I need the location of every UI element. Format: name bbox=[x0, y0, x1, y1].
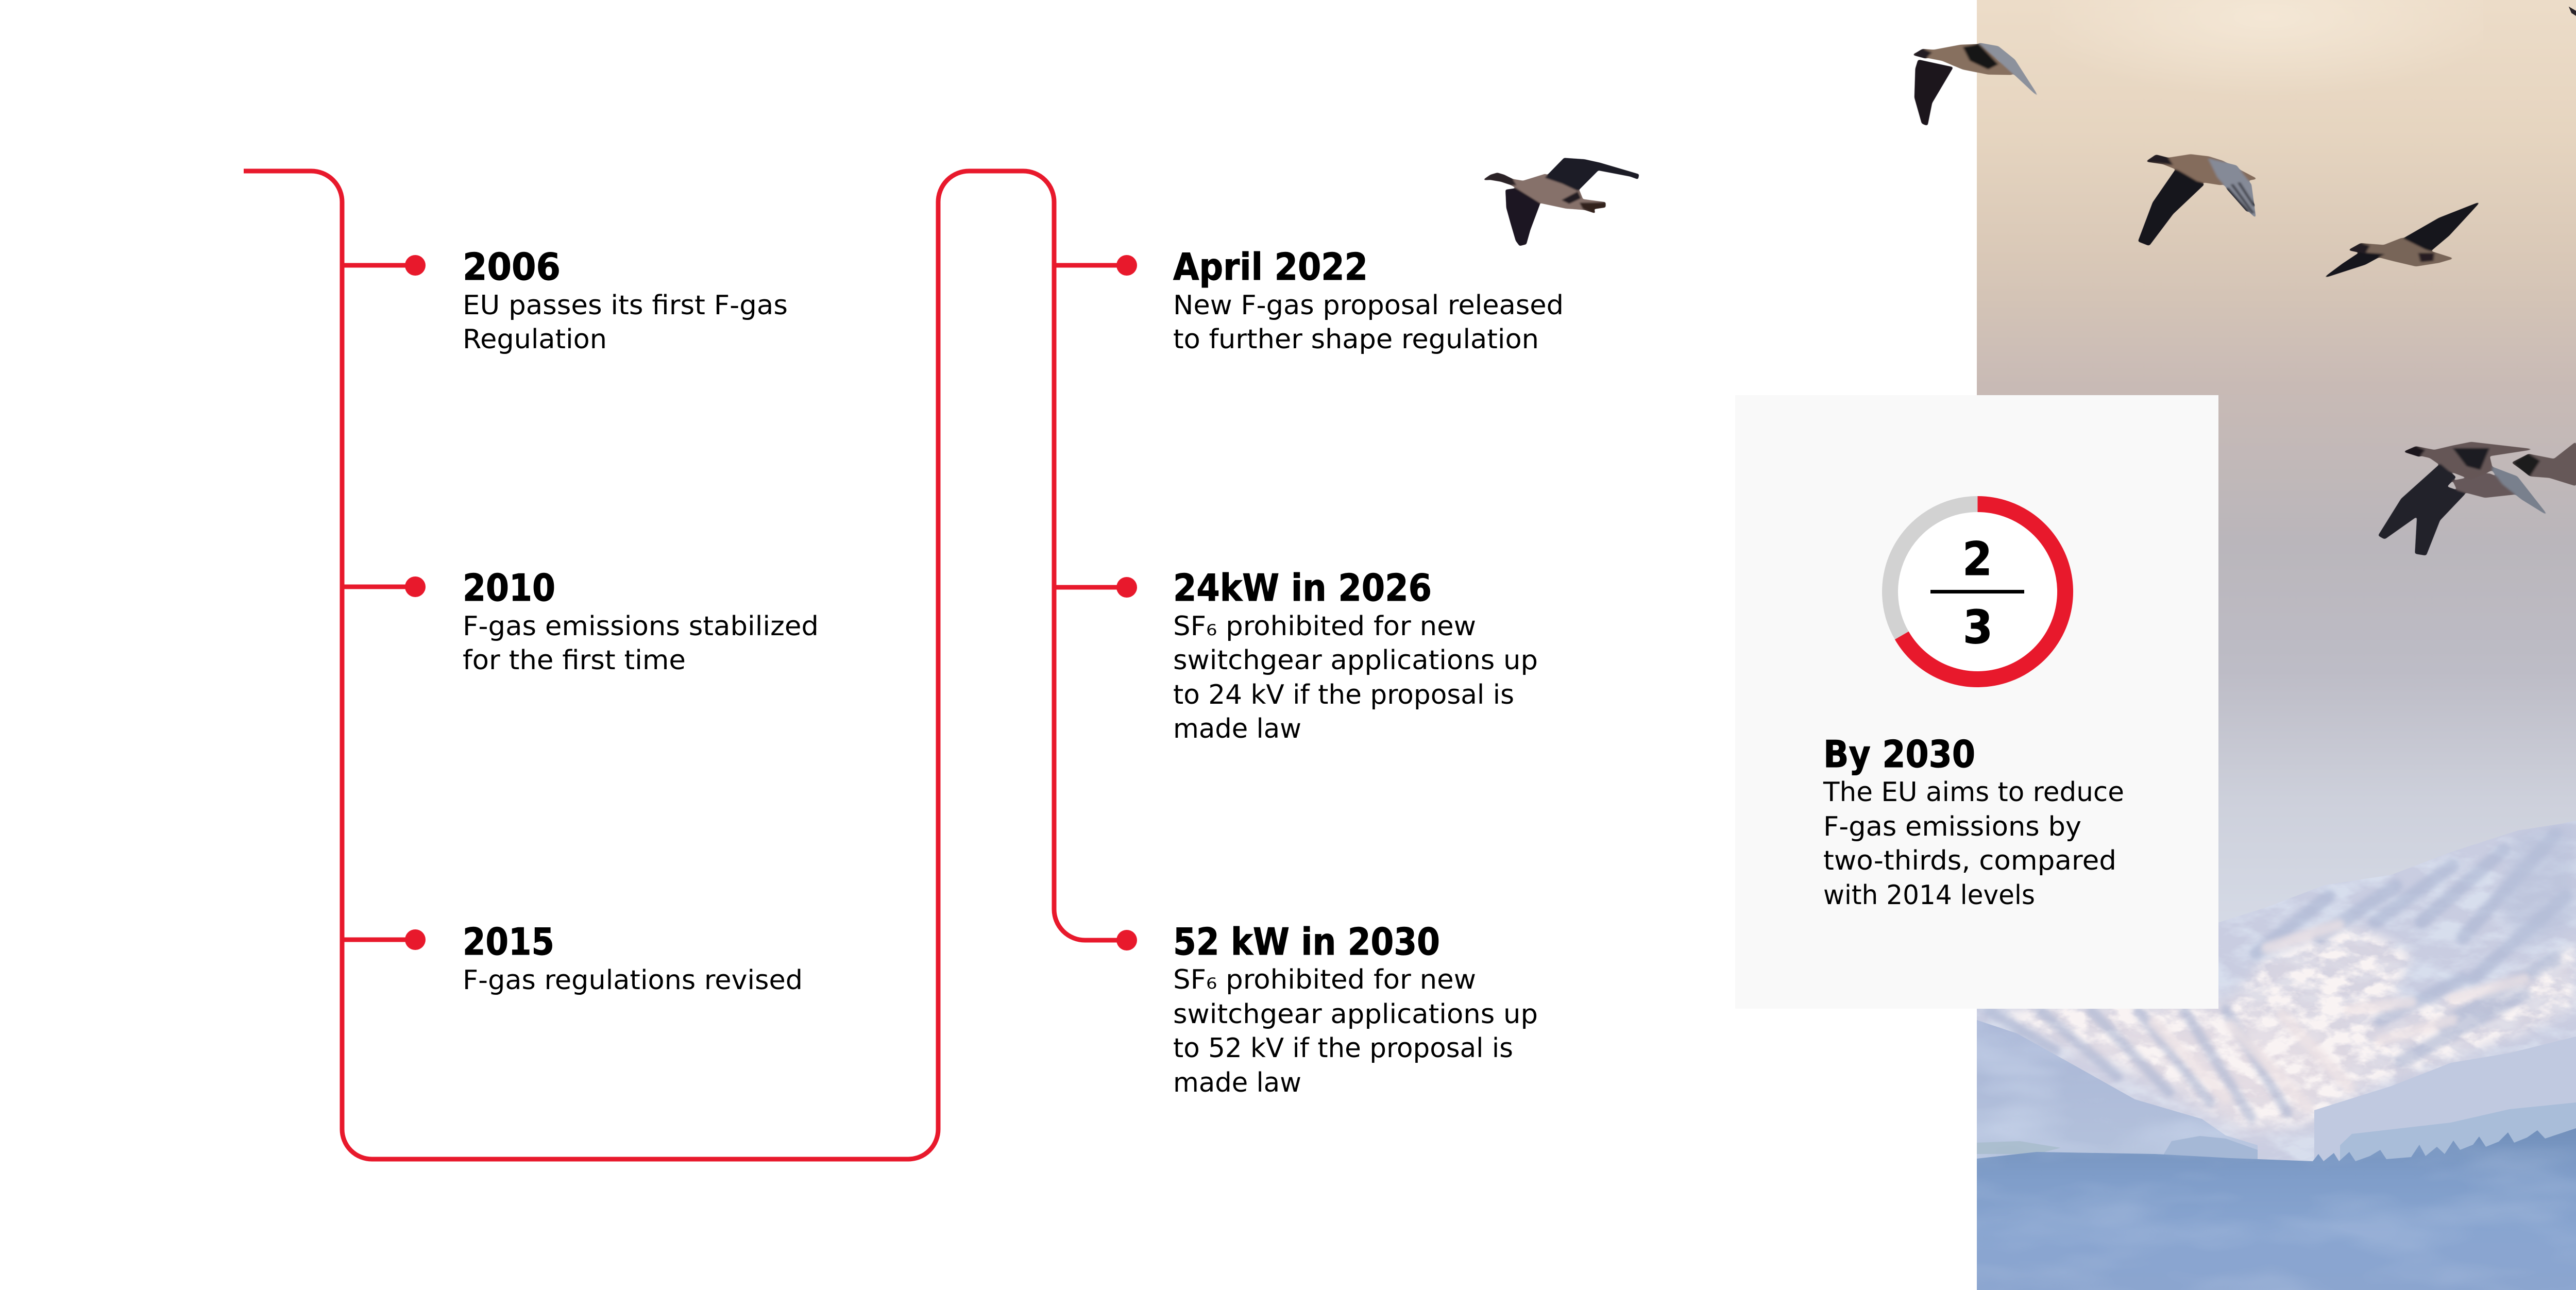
milestone: April 2022 bbox=[1054, 245, 1564, 355]
chart: two-thirds donut: 2 bbox=[1962, 532, 1992, 586]
milestone: 2010: for the first time bbox=[463, 645, 686, 676]
milestone: 52 kW in 2030: SF₆ prohibited for new bbox=[1173, 964, 1476, 995]
bird: goose on white area bbox=[1483, 158, 1639, 246]
milestone: 2006 bbox=[342, 245, 788, 355]
text: By 2030 description bbox=[1823, 777, 2124, 911]
heading: By 2030: By 2030 bbox=[1823, 733, 1975, 776]
milestone: 24kW in 2026: 24kW in 2026 bbox=[1173, 566, 1432, 609]
text: By 2030 description: two-thirds, compared bbox=[1823, 845, 2116, 876]
milestone: 24kW in 2026: SF₆ prohibited for new bbox=[1173, 611, 1476, 642]
bird: wingtip at top right corner bbox=[2569, 7, 2576, 16]
streaks: shaded gullies bbox=[1989, 835, 2566, 1118]
milestone: 52 kW in 2030 bbox=[1116, 920, 1538, 1098]
milestone: April 2022: to further shape regulation bbox=[1173, 324, 1539, 355]
panel: By 2030 callout bbox=[1735, 395, 2218, 1009]
bird: goose crossing photo edge bbox=[1913, 43, 2040, 126]
mountain: left foothill bbox=[1977, 1020, 2258, 1159]
timeline line bbox=[244, 171, 1127, 1159]
milestone: 2010 bbox=[342, 566, 819, 676]
mountain: right mid hill bbox=[2314, 1037, 2576, 1164]
milestone: 2006: Regulation bbox=[463, 324, 607, 355]
mountain: right front hill bbox=[2340, 1102, 2576, 1164]
mountain: snowy massif bbox=[1977, 819, 2576, 1190]
milestone: 24kW in 2026 bbox=[1054, 566, 1538, 744]
milestone: 2006: 2006 bbox=[463, 245, 561, 288]
milestone: 24kW in 2026: switchgear applications up bbox=[1173, 645, 1538, 676]
milestone: 52 kW in 2030: to 52 kV if the proposal is bbox=[1173, 1033, 1513, 1064]
chart: two-thirds donut bbox=[1890, 504, 2065, 679]
bird group: geese over the photo bbox=[1913, 7, 2576, 555]
photo: sky and mountains background bbox=[1977, 0, 2576, 1290]
milestone: 2015 bbox=[342, 920, 803, 996]
chart: two-thirds donut: 3 bbox=[1963, 600, 1993, 654]
bird: goose pair lower bbox=[2378, 442, 2548, 555]
milestone: April 2022: New F-gas proposal released bbox=[1173, 290, 1564, 321]
forest bbox=[1977, 1128, 2576, 1290]
milestone: 52 kW in 2030: made law bbox=[1173, 1067, 1301, 1098]
milestone: 2010: F-gas emissions stabilized bbox=[463, 611, 819, 642]
milestone: April 2022: April 2022 bbox=[1173, 245, 1368, 288]
bird: goose centre bbox=[2138, 155, 2257, 246]
bird: goose right bbox=[2323, 201, 2480, 278]
milestone: 2015: 2015 bbox=[463, 920, 554, 963]
milestone: 24kW in 2026: to 24 kV if the proposal is bbox=[1173, 680, 1514, 710]
milestone: 2015: F-gas regulations revised bbox=[463, 965, 803, 996]
text: By 2030 description: The EU aims to reduce bbox=[1823, 777, 2124, 808]
text: By 2030 description: F-gas emissions by bbox=[1823, 811, 2081, 842]
text: By 2030 description: with 2014 levels bbox=[1823, 880, 2035, 911]
bird: goose cut by right edge bbox=[2512, 442, 2576, 486]
milestone: 52 kW in 2030: 52 kW in 2030 bbox=[1173, 920, 1440, 963]
streaks: sunlit snow bbox=[2154, 925, 2524, 1108]
milestone: 24kW in 2026: made law bbox=[1173, 714, 1301, 744]
milestone: 2010: 2010 bbox=[463, 566, 555, 609]
milestone: 2006: EU passes its first F-gas bbox=[463, 290, 788, 321]
milestone: 52 kW in 2030: switchgear applications up bbox=[1173, 999, 1538, 1030]
